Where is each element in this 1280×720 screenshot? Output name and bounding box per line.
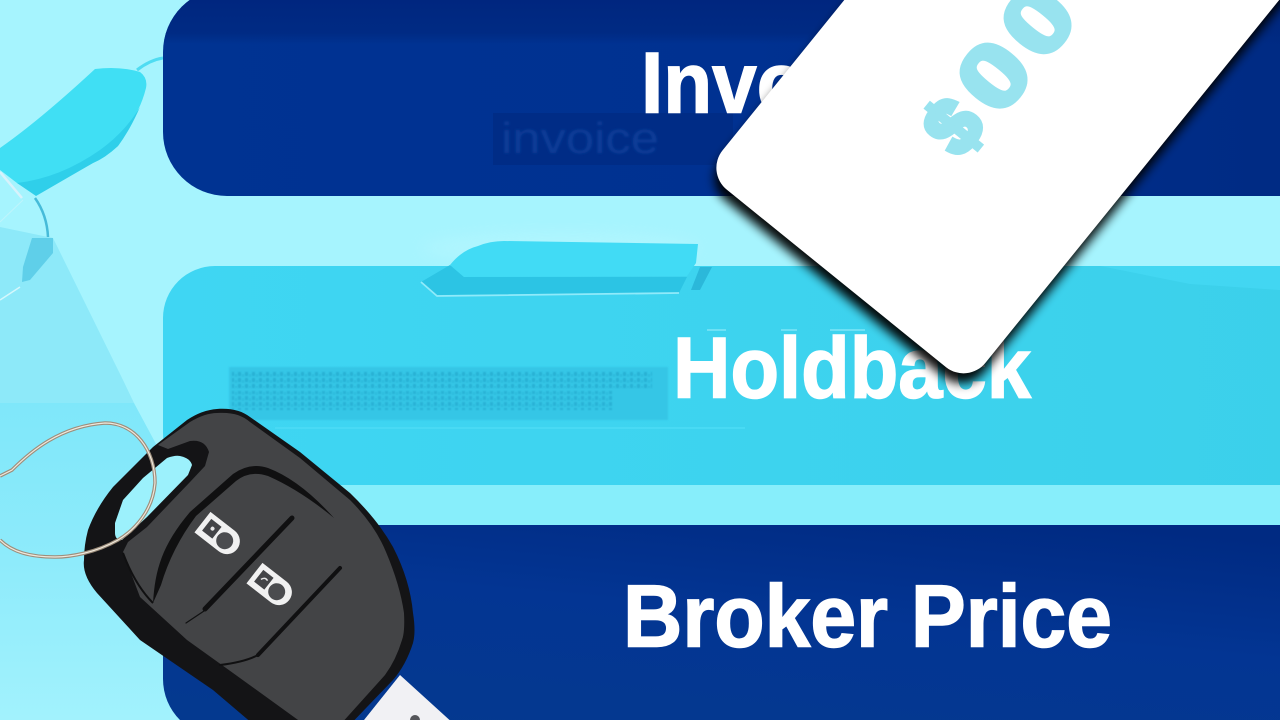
icon: black car key fob (0, 409, 455, 720)
fob body (84, 409, 414, 720)
panel: broker price (163, 525, 1280, 720)
faded pen shape (421, 241, 712, 296)
scenery: lower left wedge (0, 227, 170, 720)
icon: lock button (194, 512, 245, 559)
heading: Invoice: Invoice (641, 36, 917, 132)
button panel outline (153, 466, 334, 603)
key hole (115, 456, 192, 540)
icon: unlock button (246, 563, 297, 610)
white price card (705, 0, 1280, 385)
key blade (360, 675, 455, 720)
faded invoice label (493, 113, 733, 165)
light band (163, 484, 1280, 526)
faded invoice label: invoice (501, 114, 659, 163)
icon: faded cyan key fob (0, 58, 163, 300)
panel: invoice (163, 0, 1280, 196)
key ring (0, 423, 155, 557)
card amount (901, 0, 1140, 175)
card shadow (703, 0, 1280, 395)
button slots (186, 518, 340, 665)
soft glow above pen (420, 232, 700, 264)
fob face (123, 413, 404, 720)
panel: holdback (163, 241, 1280, 485)
heading: Broker Price: Broker Price (623, 566, 1112, 666)
card amount: $ (905, 82, 1001, 171)
faded garbled label (229, 367, 745, 428)
heading: Holdback: Holdback (673, 320, 1031, 416)
